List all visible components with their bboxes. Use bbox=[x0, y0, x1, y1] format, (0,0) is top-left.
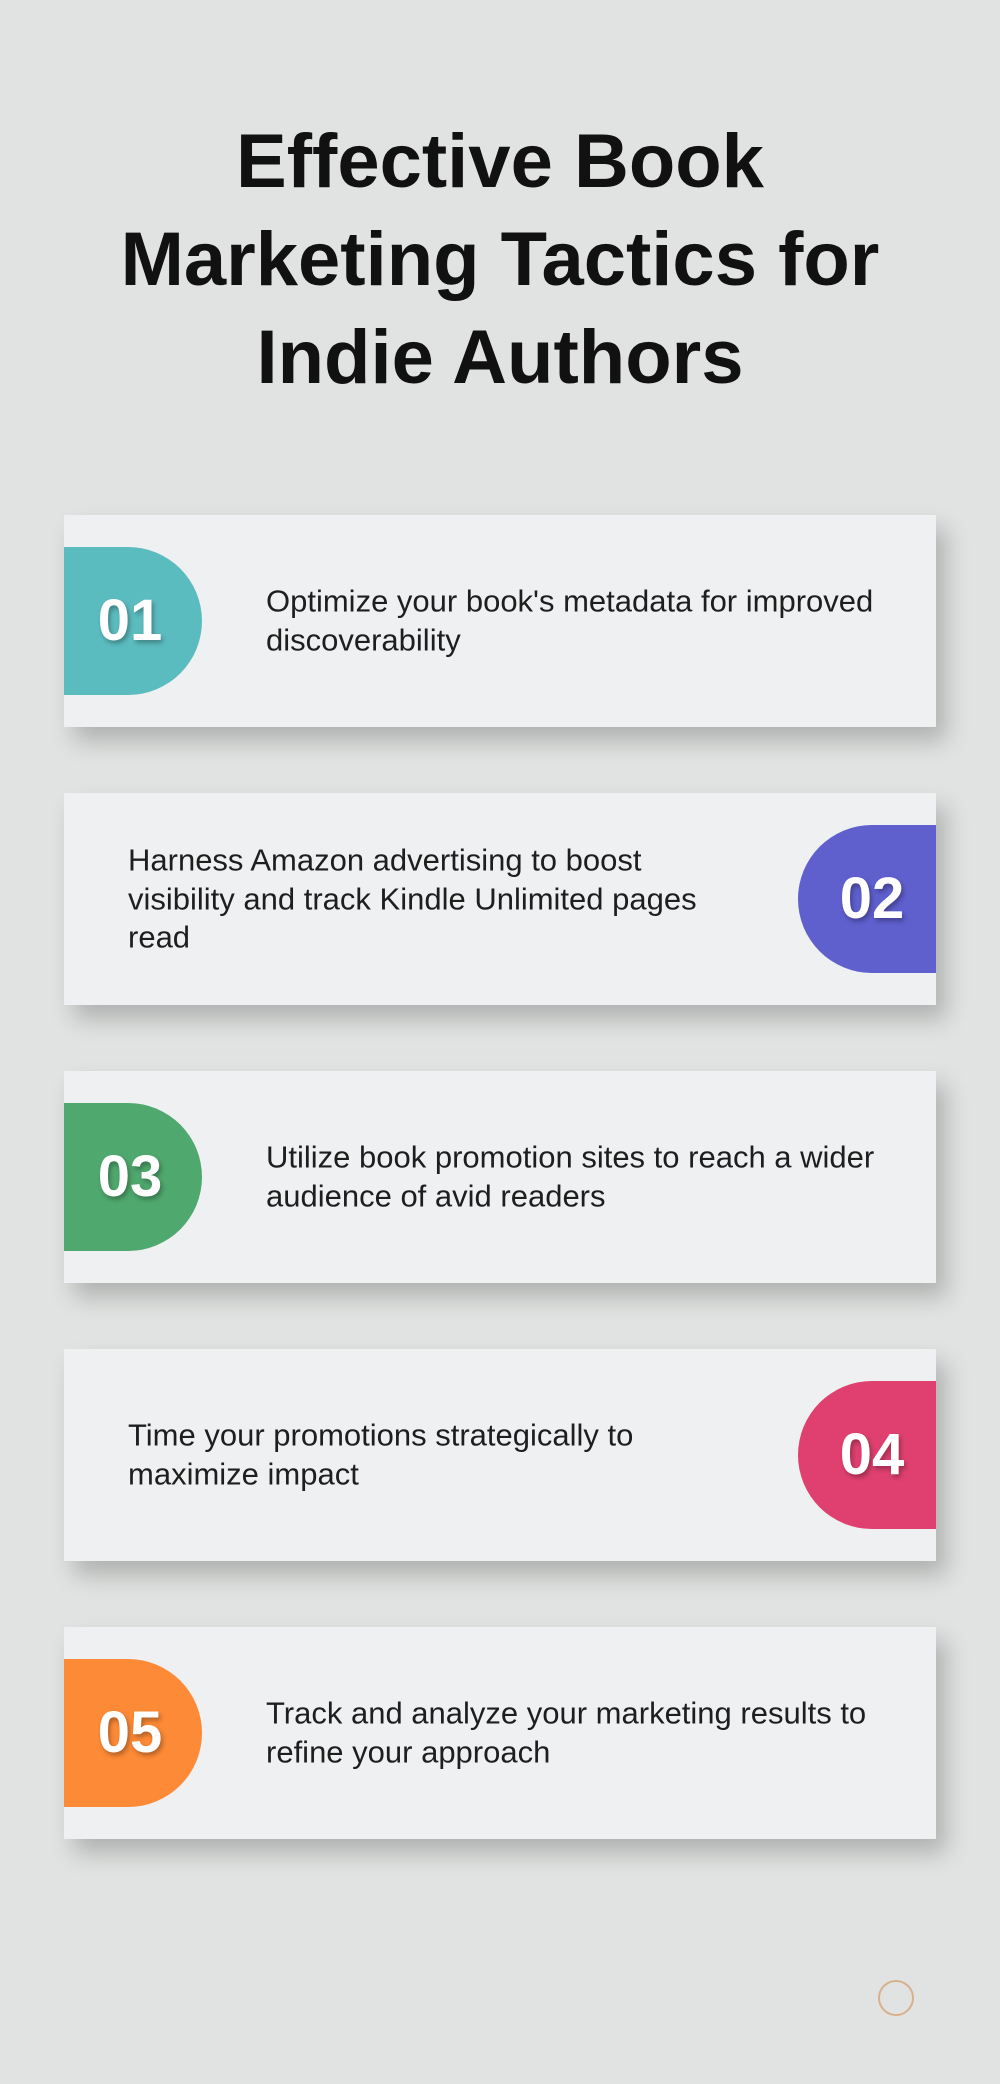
badge 05: 05 bbox=[98, 1700, 162, 1765]
badge 02: 02 bbox=[840, 866, 904, 931]
card 2 bbox=[64, 793, 936, 1005]
badge 02 bbox=[798, 825, 936, 973]
badge 01: 01 bbox=[98, 588, 162, 653]
card 1 bbox=[64, 515, 936, 727]
card 3 bbox=[64, 1071, 936, 1283]
title: Indie Authors bbox=[257, 315, 743, 400]
badge 05 bbox=[64, 1659, 202, 1807]
text 1: Optimize your book's metadata for improved discoverability bbox=[266, 584, 873, 657]
text 5: Track and analyze your marketing results to refine your approach bbox=[266, 1696, 866, 1769]
text 3: Utilize book promotion sites to reach a wider audience of avid readers bbox=[266, 1140, 874, 1213]
badge 04: 04 bbox=[840, 1422, 904, 1487]
badge 01 bbox=[64, 547, 202, 695]
badge 03: 03 bbox=[98, 1144, 162, 1209]
badge 04 bbox=[798, 1381, 936, 1529]
card 4 bbox=[64, 1349, 936, 1561]
title: Effective Book bbox=[236, 119, 764, 204]
text 2: Harness Amazon advertising to boost visibility and track Kindle Unlimited pages read bbox=[128, 842, 697, 954]
title bbox=[121, 119, 879, 400]
text 4: Time your promotions strategically to maximize impact bbox=[128, 1418, 633, 1491]
badge 03 bbox=[64, 1103, 202, 1251]
title: Marketing Tactics for bbox=[121, 217, 879, 302]
card 5 bbox=[64, 1627, 936, 1839]
logo bbox=[878, 1980, 914, 2016]
